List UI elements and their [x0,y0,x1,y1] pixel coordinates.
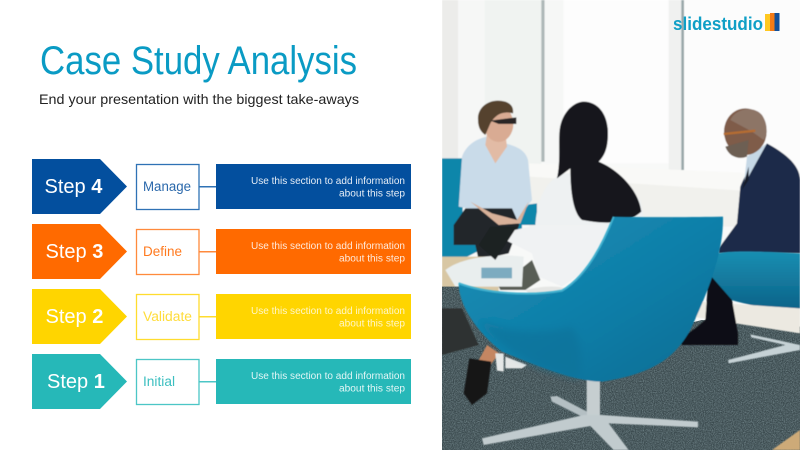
wood floor corner [772,430,800,450]
connector [199,251,216,252]
info panel: manage: Use this section to add information [251,176,405,187]
step row 4: manage [32,159,411,214]
info panel: validate [216,294,411,339]
left leg and boot [478,345,499,365]
title: Case Study Analysis [40,39,357,83]
label box: validate: Validate [143,309,192,324]
label box: manage: Manage [143,179,191,194]
pale floor strip [692,302,800,333]
swivel chair seat [459,217,723,382]
label box: initial: Initial [143,374,175,389]
arrow: step 2: Step 2 [46,306,103,328]
info panel: validate: about this step [339,318,405,330]
right sofa [709,251,800,314]
man's legs and shoe [679,273,738,345]
step row 2: validate [32,289,411,344]
arrow: step 1: Step 1 [47,371,105,393]
right chair base [728,334,800,363]
info panel: define: about this step [339,254,405,264]
connector [199,316,216,318]
connector [199,186,216,188]
table and magazine [442,227,524,293]
step row 1: initial [32,354,411,409]
photo: meeting in a lounge [442,0,800,450]
arrow: step 4 [32,159,127,214]
label box: validate [136,294,199,340]
label box: define [136,230,199,274]
subtitle: End your presentation with the biggest take-aways [39,91,359,107]
connector [199,381,216,382]
swivel chair base [482,377,698,450]
info panel: manage [216,164,411,209]
logo: slidestudio [673,13,780,34]
info panel: initial: Use this section to add information [251,371,405,382]
label box: manage [136,164,199,210]
arrow: step 2 [32,289,127,344]
center woman [492,102,645,293]
left woman [454,101,532,260]
info panel: initial: about this step [339,384,405,394]
arrow: step 3 [32,224,127,279]
right man [719,108,800,253]
bag [442,308,479,355]
info panel: define: Use this section to add information [251,241,405,252]
step row 3: define [32,224,411,279]
label box: initial [136,360,199,404]
carpet [442,287,800,450]
window wall background [442,0,800,450]
info panel: define [216,229,411,274]
label box: define: Define [143,244,182,259]
logo icon [765,13,780,31]
arrow: step 3: Step 3 [46,241,103,263]
arrow: step 1 [32,354,127,409]
info panel: initial [216,359,411,404]
info panel: validate: Use this section to add information [251,306,405,317]
info panel: manage: about this step [339,188,405,200]
arrow: step 4: Step 4 [44,176,103,198]
left sofa [442,158,537,259]
logo wordmark: slidestudio [673,14,763,34]
chair shadow [479,320,581,378]
